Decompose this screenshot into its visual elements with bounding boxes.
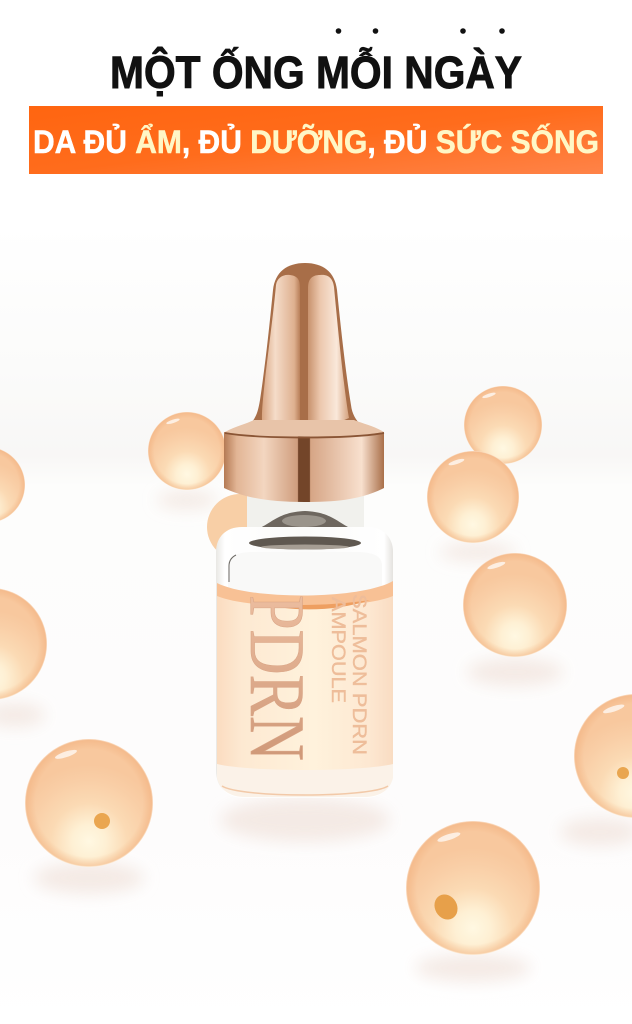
sphere: right middle <box>427 451 519 543</box>
dropper cap <box>250 263 360 424</box>
sphere: behind bottle <box>207 494 273 560</box>
sphere: bottom right <box>406 821 540 955</box>
sphere: right edge <box>574 694 632 818</box>
liquid <box>217 581 393 797</box>
sphere: upper right <box>464 386 542 464</box>
banner background <box>29 106 603 174</box>
vial label: AMPOULE: AMPOULE <box>327 597 348 703</box>
yolk: bottom right <box>430 890 462 924</box>
sphere: upper left <box>148 412 226 490</box>
glass vial <box>216 527 393 798</box>
sphere: left edge middle <box>0 588 47 700</box>
sphere: bottom left <box>25 739 153 867</box>
collar rim line <box>225 433 384 438</box>
bottle <box>216 263 393 798</box>
collar <box>224 432 384 502</box>
stray dots above title <box>336 28 505 34</box>
vial label: PDRN: PDRN <box>234 595 321 761</box>
sphere: right lower <box>463 553 567 657</box>
collar flange <box>225 420 384 438</box>
title text: MỘT ỐNG MỖI NGÀY <box>110 47 522 98</box>
spheres <box>0 386 632 955</box>
subtitle banner <box>29 106 603 174</box>
yolk: right edge <box>617 767 629 779</box>
title <box>110 28 522 98</box>
yolk: bottom left <box>94 813 110 829</box>
glass neck <box>247 495 364 531</box>
vial label: SALMON PDRN: SALMON PDRN <box>348 594 369 755</box>
sphere: left edge top <box>0 447 25 523</box>
floor shadows <box>0 491 632 982</box>
banner text: DA ĐỦ ẨM, ĐỦ DƯỠNG, ĐỦ SỨC SỐNG <box>33 122 599 160</box>
